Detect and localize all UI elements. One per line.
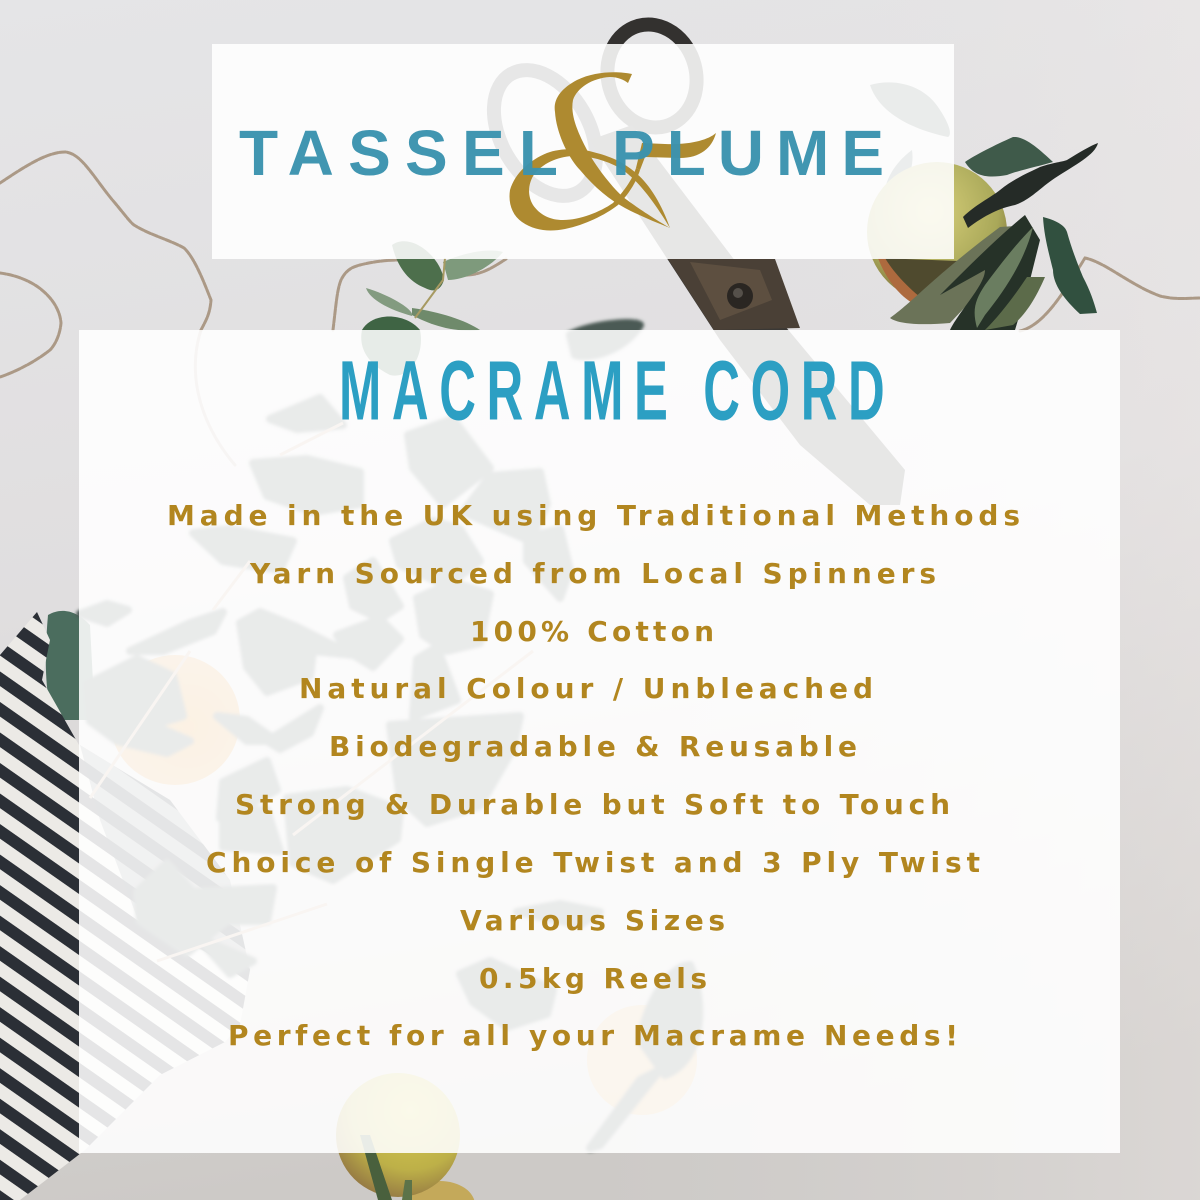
small leaves by the cloth: [46, 611, 95, 720]
feature line 1: Made in the UK using Traditional Methods: [167, 499, 1020, 532]
leaves under logo and sprig: [361, 82, 950, 376]
eucalyptus branch behind panel: [80, 323, 699, 1148]
top right fruit: [867, 162, 1007, 312]
panel: logo backdrop: [212, 44, 954, 259]
feature line 5: Biodegradable & Reusable: [329, 730, 857, 763]
feature line 9: 0.5kg Reels: [479, 962, 707, 995]
logo: [239, 72, 884, 231]
logo ampersand: [510, 72, 716, 231]
feature line 6: Strong & Durable but Soft to Touch: [235, 788, 950, 821]
logo wordmark left: TASSEL: [239, 117, 558, 189]
twine strands: [0, 152, 1200, 465]
logo wordmark right: PLUME: [612, 117, 884, 189]
eucalyptus stems: [90, 423, 533, 961]
feature line 2: Yarn Sourced from Local Spinners: [249, 557, 936, 590]
feature line 4: Natural Colour / Unbleached: [299, 672, 873, 705]
feature line 7: Choice of Single Twist and 3 Ply Twist: [206, 846, 980, 879]
orange fruits behind panel: [110, 655, 697, 1115]
feature line 8: Various Sizes: [460, 904, 725, 937]
bottom fruits: [336, 1073, 475, 1200]
striped cloth: [0, 612, 250, 1200]
feature line 10: Perfect for all your Macrame Needs!: [228, 1019, 958, 1052]
feature line 3: 100% Cotton: [470, 615, 714, 648]
top right leaves and stem: [890, 137, 1098, 330]
scissors: [473, 14, 905, 505]
feature list: [167, 499, 1020, 1052]
panel: content backdrop: [79, 330, 1120, 1153]
title: MACRAME CORD: [339, 343, 885, 438]
